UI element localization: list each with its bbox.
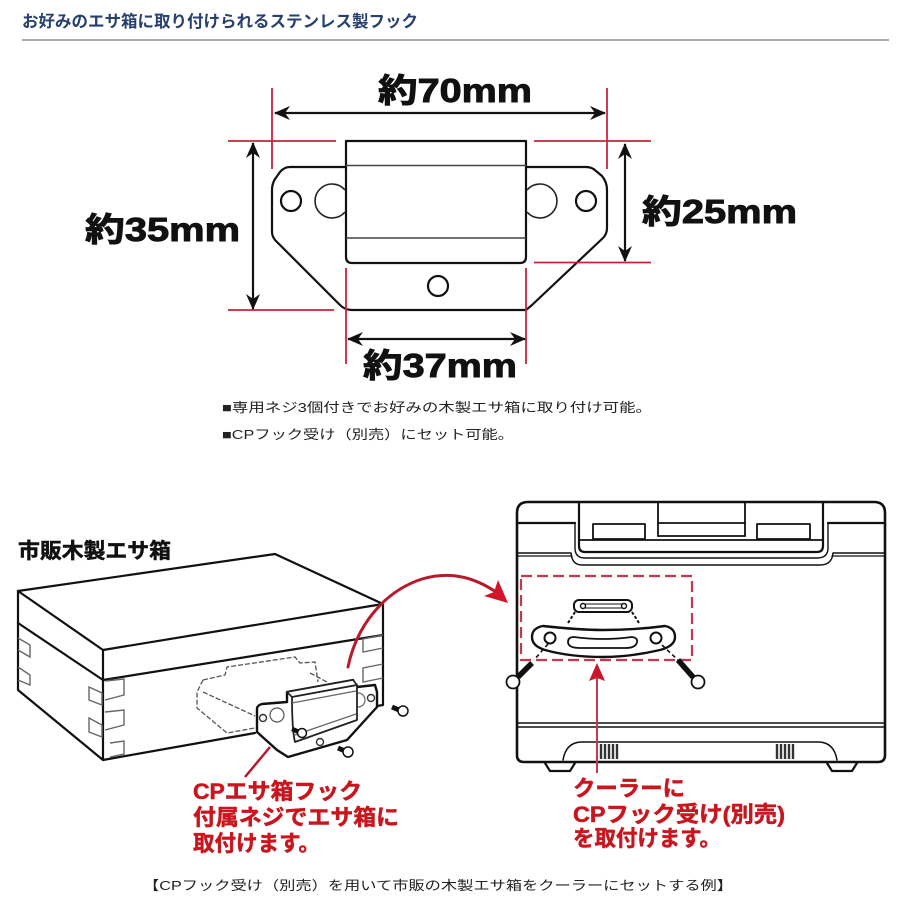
screws (292, 706, 408, 757)
bottom caption: 【CPフック受け（別売）を用いて市販の木製エサ箱をクーラーにセットする例】 (143, 878, 733, 893)
note 1: ■専用ネジ3個付きでお好みの木製エサ箱に取り付け可能。 (222, 400, 652, 415)
dashed red highlight (521, 576, 692, 660)
red curved arrow (348, 575, 508, 667)
callout line 3: 取付けます。 (193, 831, 320, 856)
grip stripes (601, 744, 793, 759)
dovetail joints (18, 635, 383, 757)
wooden bait box illustration (18, 554, 408, 760)
label: 25mm: 約25mm (642, 193, 797, 230)
hook plate outline (272, 141, 607, 310)
callout line 2: CPフック受け(別売) (573, 802, 785, 827)
red up arrow (589, 663, 605, 773)
heading: お好みのエサ箱に取り付けられるステンレス製フック (22, 12, 418, 31)
note lines (222, 400, 652, 442)
cp hook receiver (532, 600, 678, 660)
leader line to hook (245, 747, 270, 777)
callout line 1: クーラーに (573, 776, 685, 801)
dashed hook position (197, 657, 327, 733)
label: 35mm: 約35mm (85, 211, 240, 248)
note 2: ■CPフック受け（別売）にセット可能。 (222, 427, 514, 442)
red extension lines (228, 88, 651, 364)
heading rule (22, 39, 889, 41)
hook mounted on box (257, 680, 377, 757)
callout: cooler (573, 776, 785, 851)
callout line 2: 付属ネジでエサ箱に (193, 805, 399, 830)
label: 37mm: 約37mm (363, 347, 517, 384)
cooler body (517, 502, 885, 771)
label: 70mm: 約70mm (378, 72, 532, 109)
callout: bait box hook (193, 779, 399, 856)
box outline (18, 554, 383, 760)
cooler illustration (506, 502, 885, 773)
callout line 3: を取付けます。 (573, 826, 721, 851)
wooden box label: 市販木製エサ箱 (18, 540, 171, 563)
dimension arrows (253, 113, 625, 339)
dimension diagram: stainless hook (85, 72, 797, 384)
cooler screws (506, 660, 704, 688)
callout line 1: CPエサ箱フック (193, 779, 362, 804)
